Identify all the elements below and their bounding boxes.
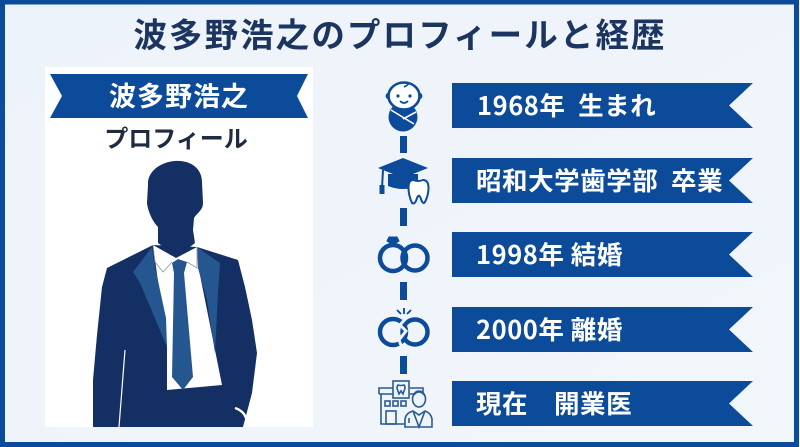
timeline row: current [452,381,753,426]
timeline row: marriage: 1998年 結婚 [476,235,623,272]
timeline row: current: 開業医 [554,384,632,421]
businessman silhouette [93,161,257,427]
timeline row: current: 現在 [476,384,528,421]
timeline row: divorce [452,307,753,352]
profile subheading: プロフィール [104,119,248,154]
icon: dental clinic and doctor [379,381,432,427]
icon: baby [386,82,422,132]
icon: graduation cap and tooth [378,158,428,203]
name ribbon [50,74,308,118]
icon: broken rings [380,308,428,348]
timeline row: graduation: 昭和大学歯学部 卒業 [476,161,723,198]
timeline row: divorce: 2000年 離婚 [476,310,623,347]
title: 波多野浩之のプロフィールと経歴 [133,8,667,57]
icon: wedding rings [380,237,428,271]
name ribbon: 波多野浩之 [109,75,249,114]
panel: profile [45,67,313,427]
timeline connector dashes [400,136,407,374]
timeline row: birth: 1968年 生まれ [477,86,656,123]
timeline row: graduation [452,158,753,203]
timeline row: marriage [452,232,753,277]
timeline row: birth [452,83,753,128]
